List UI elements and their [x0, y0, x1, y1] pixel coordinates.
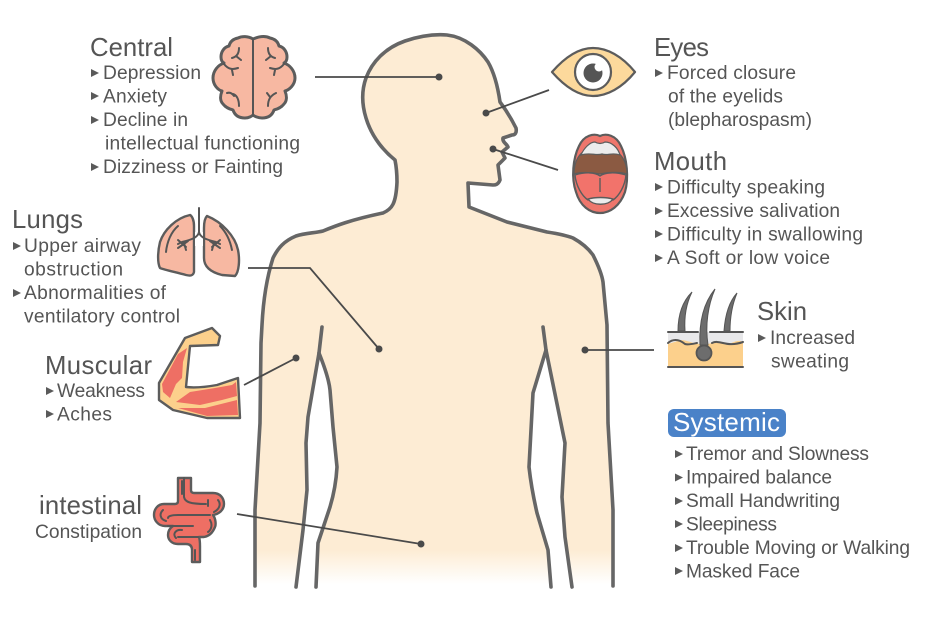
text block: lungs: ventilatory control	[24, 306, 180, 328]
text block: intestinal: intestinal	[39, 492, 142, 520]
text block: systemic list: Tremor and Slowness	[686, 444, 869, 465]
text block: central: Dizziness or Fainting	[103, 157, 283, 178]
text block: mouth	[654, 148, 863, 269]
text block: systemic list: Trouble Moving or Walking	[686, 538, 910, 559]
text block: central: intellectual functioning	[105, 134, 300, 154]
heading: systemic badge: Systemic	[673, 407, 780, 437]
text block: central	[90, 34, 300, 178]
icon: lungs	[158, 208, 239, 276]
text block: muscular: Muscular	[45, 352, 152, 380]
icon: mouth	[573, 135, 627, 213]
text block: systemic list	[675, 444, 910, 582]
text block: mouth: Excessive salivation	[667, 201, 840, 222]
left arm inner line	[296, 327, 322, 587]
text block: eyes	[654, 34, 812, 131]
text block: mouth: Difficulty speaking	[667, 178, 825, 198]
body fill	[255, 35, 613, 590]
text block: lungs: Upper airway	[24, 236, 141, 257]
connector: central	[315, 74, 442, 80]
text block: eyes: Forced closure	[667, 63, 796, 84]
icon: intestines	[154, 478, 224, 562]
text block: muscular: Aches	[57, 404, 112, 426]
text block: eyes: (blepharospasm)	[668, 110, 812, 131]
text block: lungs	[12, 206, 180, 328]
text block: systemic list: Sleepiness	[686, 514, 777, 536]
connector: mouth	[490, 146, 558, 170]
connector: skin	[582, 346, 654, 354]
body silhouette	[255, 35, 613, 590]
text block: systemic list: Masked Face	[686, 562, 800, 582]
gap between right arm and torso	[529, 350, 572, 590]
text block: systemic list: Small Handwriting	[686, 491, 840, 512]
text block: systemic list: Impaired balance	[686, 468, 832, 488]
text block: central: Central	[90, 34, 173, 62]
text block: skin	[757, 298, 855, 372]
text block: central: Anxiety	[103, 86, 167, 108]
text block: mouth: Difficulty in swallowing	[667, 224, 863, 246]
text block: lungs: Lungs	[12, 206, 83, 234]
text block: intestinal: Constipation	[35, 522, 142, 543]
connector: intestinal	[237, 514, 424, 548]
text block: central: Depression	[103, 63, 201, 84]
text block: lungs: Abnormalities of	[24, 283, 167, 304]
left torso line	[316, 353, 337, 587]
connector: muscular	[244, 354, 300, 385]
text block: intestinal	[35, 492, 142, 543]
text block: skin: sweating	[771, 352, 849, 372]
text block: eyes: of the eyelids	[668, 86, 783, 108]
connector: eyes	[482, 90, 549, 116]
icon: brain	[213, 37, 295, 118]
text block: lungs: obstruction	[24, 260, 123, 280]
right arm inner line	[543, 327, 572, 587]
text block: skin: Skin	[757, 298, 807, 326]
text block: central: Decline in	[103, 110, 188, 131]
gap between left arm and torso	[296, 353, 337, 590]
text block: eyes: Eyes	[654, 34, 709, 62]
text block: skin: Increased	[770, 328, 855, 349]
icon: eye	[552, 48, 635, 96]
text block: muscular: Weakness	[57, 381, 145, 402]
connector: lungs	[248, 268, 382, 352]
text block: mouth: A Soft or low voice	[667, 248, 830, 269]
body outline	[255, 35, 613, 586]
text block: muscular	[45, 352, 152, 426]
right torso line	[529, 350, 551, 587]
text block: mouth: Mouth	[654, 148, 727, 176]
icon: flexed arm muscle	[159, 328, 240, 418]
icon: skin and hair follicle	[668, 289, 743, 367]
